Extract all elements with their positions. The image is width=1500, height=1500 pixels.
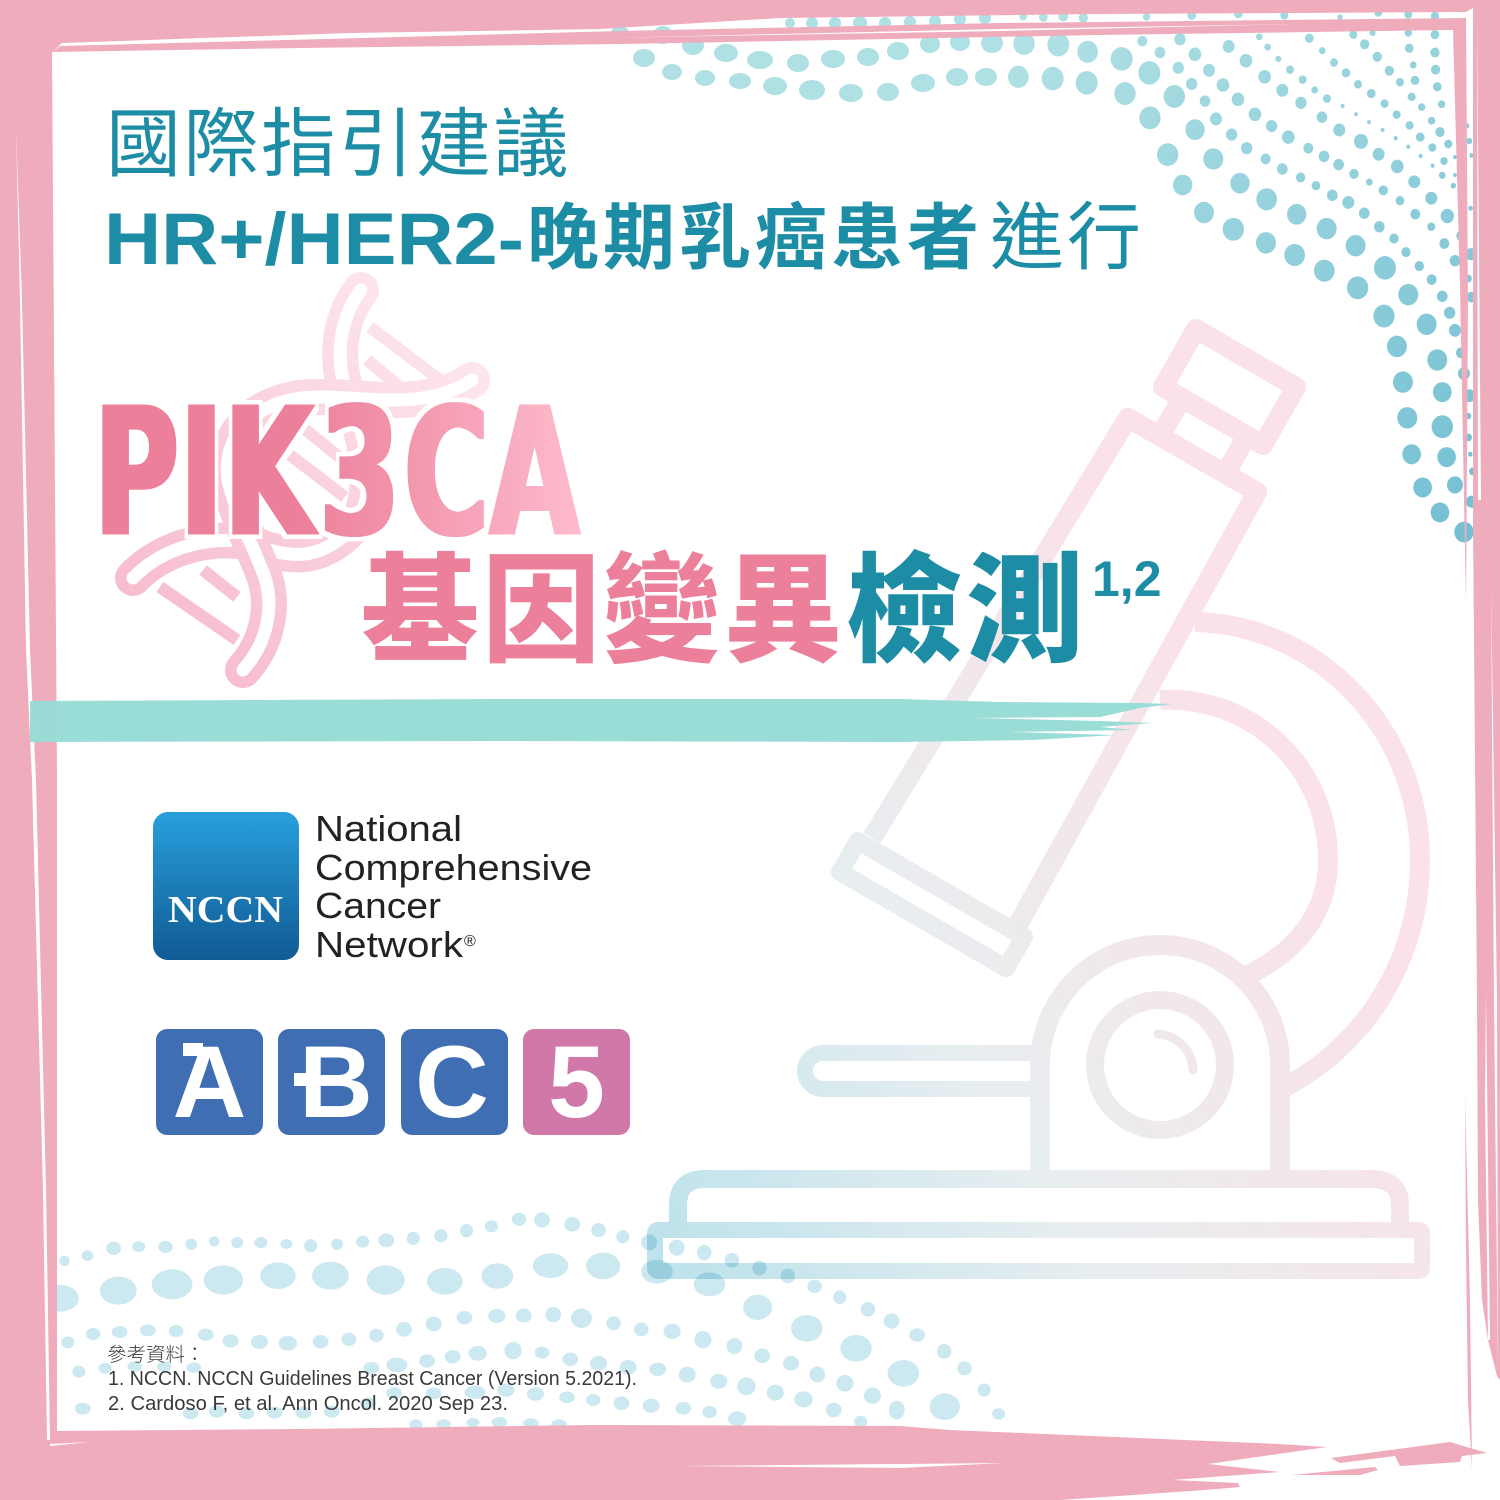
heading: PIK3CA: PIK3CA bbox=[94, 370, 579, 577]
heading: gene mutation testing: 基因變異檢測 bbox=[361, 515, 1087, 686]
dot pattern: bottom left bbox=[42, 1212, 1005, 1429]
title: line 1: 國際指引建議 bbox=[106, 83, 571, 192]
references bbox=[107, 1338, 637, 1415]
tube bbox=[872, 418, 1257, 930]
logo: ABC5: C bbox=[415, 1025, 489, 1139]
title: line 2: 晚期乳癌患者 bbox=[527, 179, 983, 284]
title: line 2: HR+/HER2- bbox=[104, 199, 524, 280]
title: line 2 bbox=[104, 178, 1144, 285]
stage bbox=[805, 1053, 1034, 1089]
superscript references: 1,2 bbox=[1092, 551, 1162, 607]
logo: ABC5: B bbox=[299, 1025, 373, 1139]
logo: NCCN bbox=[153, 808, 592, 965]
base bbox=[678, 1179, 1400, 1225]
arm bbox=[1195, 622, 1420, 1087]
objective ring bbox=[840, 841, 1024, 968]
logo: NCCN: ® bbox=[464, 933, 476, 950]
logo: NCCN: National bbox=[315, 808, 462, 849]
eyepiece bbox=[1163, 329, 1296, 445]
logo: NCCN: Network bbox=[315, 924, 464, 965]
lens circle bbox=[1095, 1000, 1225, 1130]
logo: ABC5: A bbox=[173, 1025, 246, 1139]
neck bbox=[1160, 400, 1246, 474]
logo: ABC5: 5 bbox=[548, 1025, 605, 1139]
teal brush divider bbox=[30, 699, 1172, 742]
dot pattern: top right bbox=[610, 8, 1477, 542]
title: line 2: 進行 bbox=[990, 178, 1144, 285]
icon: microscope bbox=[655, 329, 1422, 1271]
references: 參考資料： bbox=[107, 1338, 205, 1367]
logo: NCCN: NCCN bbox=[168, 889, 283, 931]
logo: NCCN: Comprehensive bbox=[315, 847, 592, 888]
logo: NCCN: Cancer bbox=[315, 885, 441, 926]
icon: DNA helix bbox=[133, 290, 472, 670]
body bbox=[1040, 945, 1280, 1175]
logo: ABC5 bbox=[156, 1025, 630, 1139]
references: 2. Cardoso F, et al. Ann Oncol. 2020 Sep 23. bbox=[108, 1393, 508, 1415]
references: 1. NCCN. NCCN Guidelines Breast Cancer (Version 5.2021). bbox=[108, 1368, 637, 1390]
